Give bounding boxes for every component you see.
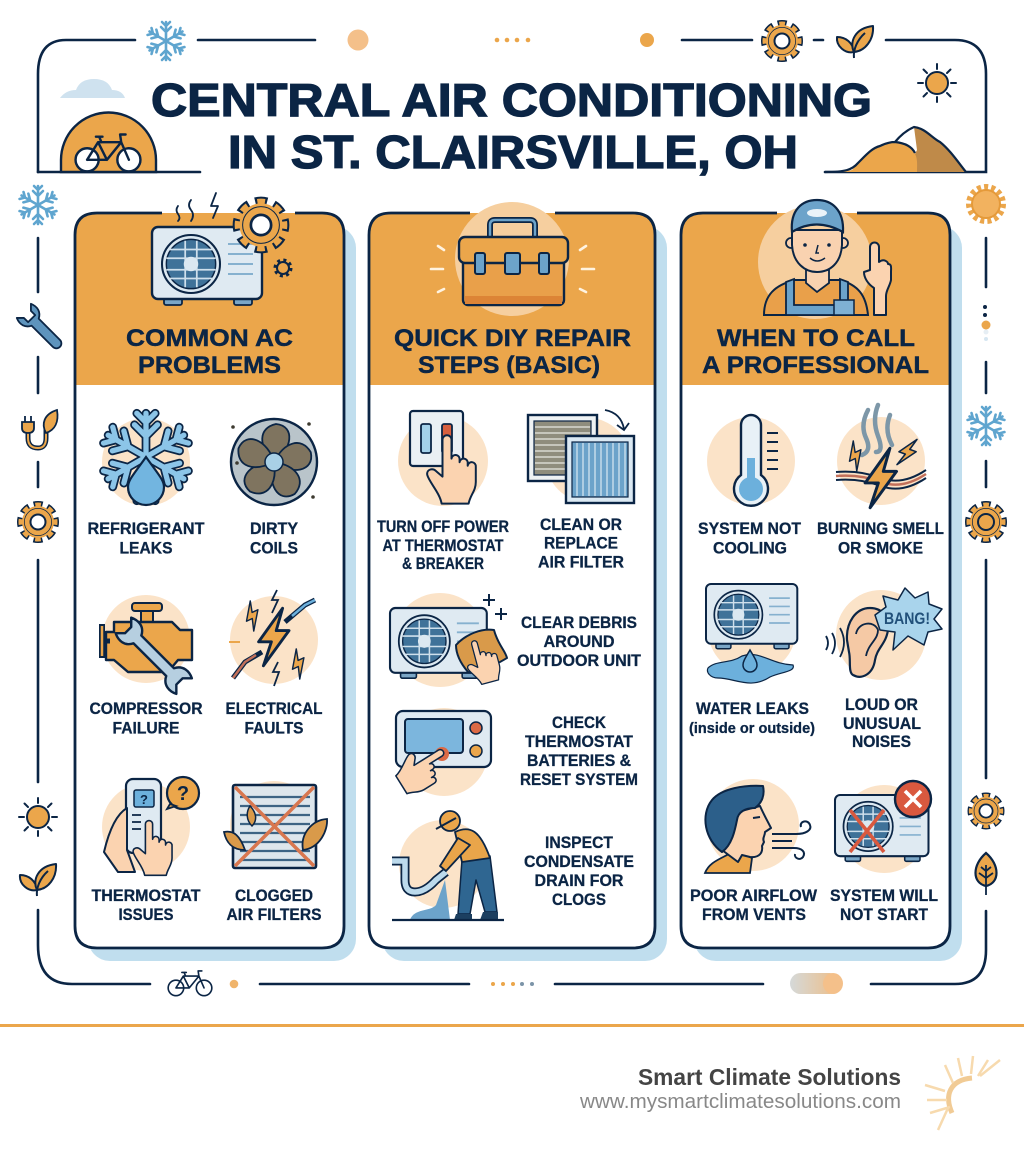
- item: loud noises: UNUSUAL: [843, 714, 921, 733]
- icon: sun top right of panels: [969, 187, 1003, 221]
- icon: side sun left: [19, 798, 57, 836]
- item: refrigerant leaks: REFRIGERANT: [88, 519, 205, 538]
- item: thermostat issues: [92, 777, 201, 924]
- item: compressor failure: [90, 595, 202, 738]
- item: clean or replace air filter: REPLACE: [544, 534, 618, 552]
- panel body: [75, 213, 344, 948]
- side dots right: [982, 305, 990, 341]
- item: system will not start: NOT START: [840, 905, 929, 924]
- item: clean or replace air filter: [528, 410, 634, 572]
- item: refrigerant leaks: LEAKS: [120, 538, 172, 558]
- icon: side gear right: [969, 505, 1003, 539]
- item: thermostat issues: ISSUES: [118, 905, 174, 924]
- title: IN ST. CLAIRSVILLE, OH: [228, 126, 798, 178]
- item: turn off power: [377, 411, 509, 573]
- panel shadow: [694, 226, 962, 961]
- item: inspect condensate drain: INSPECT: [545, 833, 614, 852]
- item: clear debris: [390, 593, 642, 687]
- item: clear debris: CLEAR DEBRIS: [521, 613, 637, 632]
- bottom dot: [230, 980, 238, 988]
- item: clogged air filters: CLOGGED: [235, 886, 313, 905]
- heading: STEPS (BASIC): [418, 352, 600, 379]
- footer brand text: Smart Climate Solutions: [638, 1064, 901, 1090]
- panel header band: [681, 213, 950, 385]
- icon: cloud: [60, 79, 125, 98]
- item: system not cooling: COOLING: [713, 538, 787, 558]
- icon: outdoor AC unit: [152, 227, 262, 305]
- icon: side snowflake right: [967, 407, 1005, 445]
- heading: PROBLEMS: [138, 352, 281, 379]
- panel header band: [369, 213, 655, 385]
- item: inspect condensate drain: CONDENSATE: [524, 852, 634, 871]
- icon: large gear: [238, 202, 284, 248]
- heading: WHEN TO CALL: [717, 325, 915, 352]
- item: inspect condensate drain: CLOGS: [552, 890, 606, 909]
- title frame: [38, 40, 986, 172]
- heading: QUICK DIY REPAIR: [394, 325, 631, 352]
- bottom capsule: [790, 973, 843, 994]
- panel shadow: [88, 226, 356, 961]
- panel: quick DIY repair steps: [369, 202, 667, 961]
- panel outline: [681, 213, 950, 948]
- icon: top leaves: [837, 26, 873, 58]
- item: loud noises: BANG!: [884, 609, 930, 628]
- bottom dots: [491, 982, 534, 986]
- icon: top orange circle: [348, 30, 368, 50]
- icon: side leaf right: [976, 853, 996, 895]
- item: check thermostat: THERMOSTAT: [525, 732, 634, 751]
- icon: mountain: [825, 127, 966, 172]
- item: loud noises: LOUD OR: [845, 695, 918, 714]
- icon: side plug with leaf: [22, 410, 58, 448]
- item: electrical faults: ELECTRICAL: [226, 699, 322, 718]
- footer logo sun: [925, 1056, 1000, 1130]
- item: thermostat issues: ?: [177, 783, 189, 805]
- item: clear debris: AROUND: [544, 632, 614, 651]
- item: system not cooling: SYSTEM NOT: [698, 519, 802, 538]
- item: system will not start: SYSTEM WILL: [830, 886, 938, 905]
- item: burning smell or smoke: OR SMOKE: [838, 538, 923, 558]
- item: inspect condensate drain: DRAIN FOR: [534, 871, 624, 890]
- bottom bicycle: [168, 971, 212, 996]
- panel body: [681, 213, 950, 948]
- icon: toolbox rays: [431, 246, 594, 292]
- footer brand text: www.mysmartclimatesolutions.com: [579, 1091, 901, 1113]
- icon: small orange circle: [640, 33, 654, 47]
- item: burning smell or smoke: [817, 405, 944, 558]
- item: check thermostat: CHECK: [552, 713, 607, 732]
- item: poor airflow: [690, 779, 818, 924]
- item: water leaks: WATER LEAKS: [696, 699, 809, 718]
- footer rule: [0, 1024, 1024, 1027]
- item: water leaks: (inside or outside): [689, 720, 815, 737]
- item: thermostat issues: THERMOSTAT: [92, 886, 201, 905]
- panel header band: [75, 213, 344, 385]
- icon: top gear: [765, 24, 799, 58]
- footer brand text: [579, 1064, 901, 1113]
- top dots: [495, 38, 530, 42]
- item: poor airflow: FROM VENTS: [702, 905, 806, 924]
- item: thermostat issues: ?: [140, 792, 148, 807]
- heading: [394, 325, 631, 379]
- item: water leaks: [689, 584, 815, 737]
- item: loud noises: NOISES: [852, 732, 911, 751]
- item: compressor failure: FAILURE: [112, 718, 180, 738]
- item: electrical faults: [226, 590, 322, 738]
- item: refrigerant leaks: [88, 413, 205, 558]
- item: burning smell or smoke: BURNING SMELL: [817, 519, 944, 538]
- icon: top snowflake: [147, 22, 185, 60]
- item: loud noises: [826, 588, 942, 751]
- item: turn off power: AT THERMOSTAT: [382, 536, 504, 555]
- item: inspect condensate drain: [392, 811, 634, 920]
- heading: [702, 325, 929, 379]
- heading: A PROFESSIONAL: [702, 352, 929, 379]
- heading: COMMON AC: [126, 325, 293, 352]
- item: clean or replace air filter: AIR FILTER: [538, 552, 624, 572]
- item: system not cooling: [698, 415, 802, 558]
- icon: side gear right lower: [971, 796, 1001, 826]
- item: dirty coils: DIRTY: [250, 519, 299, 538]
- panel outline: [75, 213, 344, 948]
- item: turn off power: TURN OFF POWER: [377, 517, 509, 536]
- panel body: [369, 213, 655, 948]
- panel: common AC problems: [75, 193, 356, 961]
- panel shadow: [382, 226, 667, 961]
- item: poor airflow: POOR AIRFLOW: [690, 886, 818, 905]
- item: turn off power: & BREAKER: [402, 554, 484, 573]
- icon: side leaves left: [20, 864, 56, 896]
- item: clogged air filters: [224, 781, 327, 924]
- icon: side wrench: [16, 303, 68, 355]
- item: check thermostat: [390, 708, 638, 798]
- icon: toolbox: [455, 202, 569, 316]
- item: electrical faults: FAULTS: [244, 718, 304, 738]
- icon: side snowflake left: [19, 186, 57, 224]
- icon: bicycle hill: [61, 112, 156, 172]
- item: dirty coils: COILS: [250, 538, 298, 558]
- item: compressor failure: COMPRESSOR: [90, 699, 202, 718]
- item: check thermostat: RESET SYSTEM: [520, 770, 638, 789]
- icon: heat squiggles and bolt: [176, 193, 218, 221]
- icon: small gear: [275, 260, 291, 276]
- panel: when to call a professional: [681, 200, 962, 961]
- item: check thermostat: BATTERIES &: [527, 751, 631, 770]
- item: system will not start: [830, 781, 938, 924]
- title: CENTRAL AIR CONDITIONING: [151, 74, 872, 126]
- panel outline: [369, 213, 655, 948]
- item: clean or replace air filter: CLEAN OR: [540, 515, 622, 534]
- icon: technician: [758, 200, 891, 319]
- heading: [126, 325, 293, 379]
- side rails: [38, 238, 986, 984]
- item: clogged air filters: AIR FILTERS: [226, 905, 322, 924]
- item: clear debris: OUTDOOR UNIT: [517, 651, 642, 670]
- title: [151, 74, 872, 178]
- item: dirty coils: [231, 419, 317, 558]
- icon: sun top right: [918, 64, 956, 102]
- icon: side gear left: [21, 505, 55, 539]
